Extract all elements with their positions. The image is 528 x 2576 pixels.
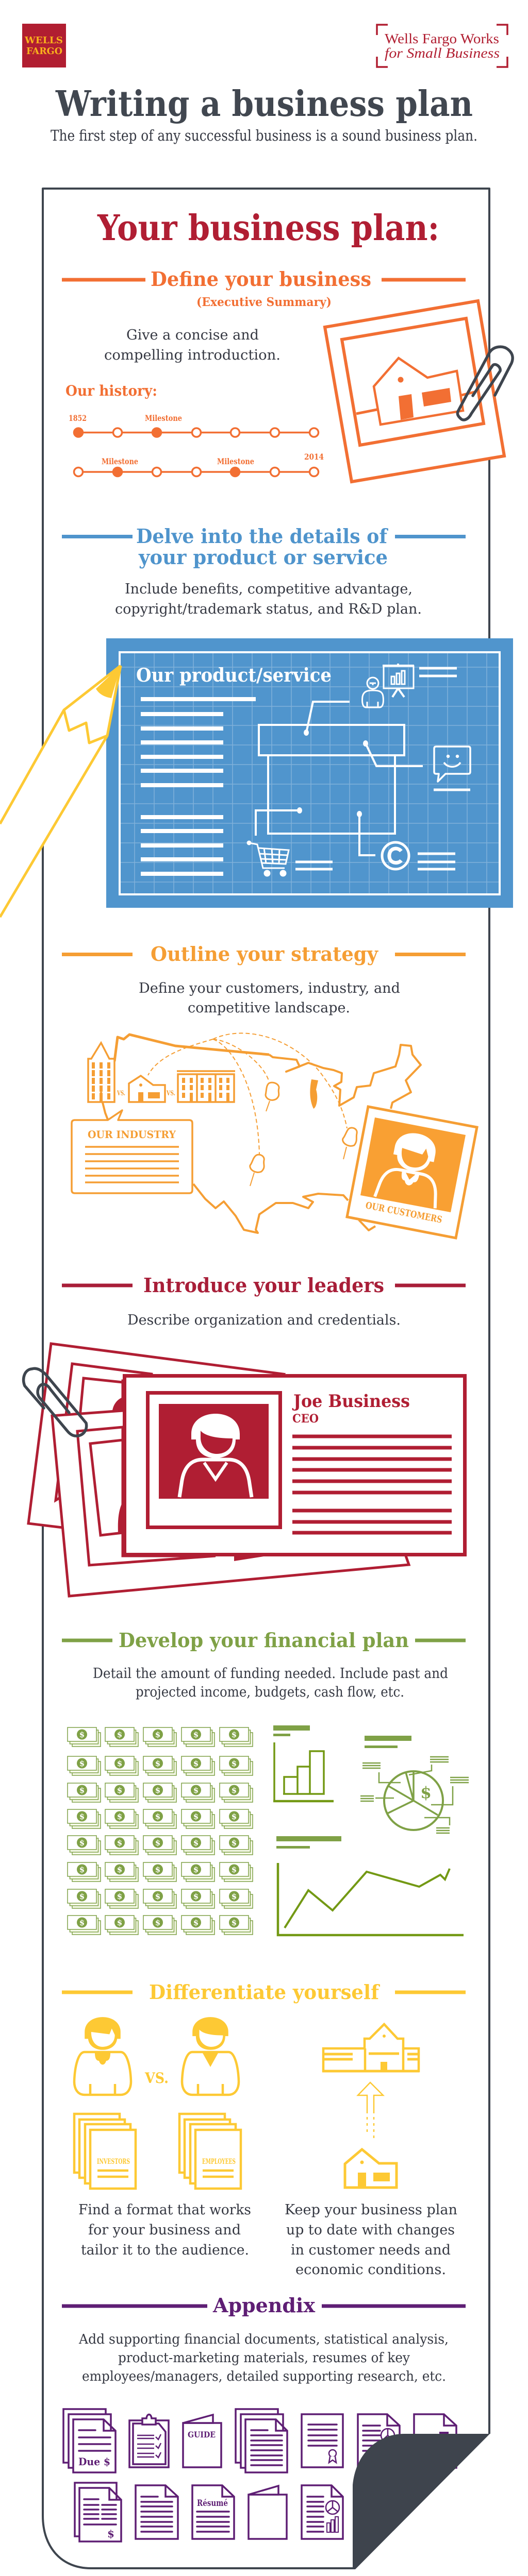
heading: Introduce your leaders: [62, 1274, 466, 1297]
text: appendix description: Add supporting financial documents, statistical analysis,: [78, 2332, 449, 2347]
icon: yellow pencil: [0, 666, 121, 917]
blueprint title: Our product/service: [136, 665, 332, 686]
icons: appendix documents: [63, 2409, 456, 2541]
section: product or service: [0, 524, 513, 917]
text: financial description: Detail the amount of funding needed. Include past and: [93, 1666, 448, 1682]
doc: charts page: [302, 2485, 343, 2539]
chart: pie chart: $: [420, 1784, 432, 1802]
text: keep up to date: in customer needs and: [291, 2242, 451, 2258]
icon: grid of money stacks: $$$$$: [79, 1865, 237, 1874]
icon: speech bubble with smile: [434, 747, 470, 782]
doc: report stack: [236, 2409, 287, 2472]
doc: chart report: [358, 2414, 400, 2468]
text: strategy description: Define your customers, industry, and: [139, 980, 400, 996]
heading: Our history: Our history:: [65, 382, 157, 399]
doc: partially covered page: [414, 2414, 456, 2468]
text: introduction: compelling introduction.: [104, 347, 280, 363]
icon: grid of money stacks: $$$$$: [79, 1838, 237, 1848]
heading: Your business plan: Your business plan:: [97, 208, 439, 249]
section: financial plan: [62, 1629, 469, 1935]
icon: woman vs man: VS.: [144, 2070, 169, 2087]
panel: blueprint: [106, 638, 513, 908]
doc: text page: [136, 2485, 178, 2539]
icon: competitor buildings: VS.: [166, 1090, 175, 1097]
heading: Develop your financial plan: Develop your financial plan: [119, 1629, 409, 1652]
text: format: for your business and: [88, 2222, 241, 2238]
icon: small house: [345, 2149, 397, 2188]
heading: Differentiate yourself: [62, 1980, 466, 2004]
doc: invoice stack: [75, 2483, 121, 2541]
timeline: row 1: [69, 413, 319, 437]
text: introduction: Give a concise and: [126, 327, 259, 343]
text: strategy description: competitive landscape.: [188, 1000, 350, 1016]
text: appendix description: product-marketing materials, resumes of key: [118, 2350, 410, 2366]
back papers: [28, 1344, 412, 1596]
heading: Differentiate yourself: Differentiate yourself: [149, 1980, 381, 2004]
icon: grid of money stacks: $$$$$: [79, 1892, 237, 1901]
blueprint text lines: [141, 699, 256, 874]
icon: competitor buildings: VS.: [117, 1090, 125, 1097]
heading: Define your business: [62, 267, 466, 309]
doc: invoice stack: $: [107, 2528, 114, 2540]
text: strategy description: [139, 980, 400, 1016]
text: format: tailor it to the audience.: [81, 2242, 249, 2258]
heading: Delve into the details: your product or service: [138, 546, 388, 569]
card: Joe Business: [125, 1376, 465, 1555]
blueprint side lines: [295, 668, 470, 869]
callout: our industry: OUR INDUSTRY: [88, 1128, 176, 1141]
icon: document stack employees: EMPLOYEES: [202, 2158, 236, 2166]
arrow: growth upward: [358, 2082, 383, 2140]
text: financial description: projected income, budgets, cash flow, etc.: [136, 1684, 404, 1700]
pins: [250, 1082, 357, 1172]
heading: Outline your strategy: [62, 942, 466, 965]
icon: grid of money stacks: $$$$$: [79, 1786, 237, 1795]
icon: customer polaroid: OUR CUSTOMERS: [365, 1200, 443, 1226]
panel: business plan page outline: [43, 189, 489, 2568]
chart: line chart: [276, 1836, 464, 1935]
heading: Introduce your leaders: Introduce your leaders: [143, 1274, 384, 1297]
timeline: row 2: Milestone: [217, 456, 254, 466]
icon: document stack investors: INVESTORS: [97, 2158, 130, 2166]
icon: document stack employees: [179, 2114, 241, 2189]
icon: grid of money stacks: $$$$$: [79, 1759, 237, 1768]
icon: shopping cart: [248, 841, 289, 876]
doc: guide booklet: [183, 2415, 221, 2467]
icon: grid of money stacks: $$$$$: [79, 1812, 237, 1821]
text: product description: copyright/trademark status, and R&D plan.: [115, 601, 422, 617]
icon: competitor buildings: [88, 1043, 235, 1102]
doc: clipboard: [129, 2414, 169, 2467]
heading: Appendix: [62, 2294, 466, 2317]
icon: grid of money stacks: $$$$$: [79, 1918, 237, 1927]
icon: polaroid with house: [325, 301, 504, 482]
icon: customer polaroid: [347, 1107, 477, 1238]
portrait: man: [179, 1414, 252, 1497]
doc: resume: Résumé: [197, 2498, 228, 2509]
doc: blank booklet: [249, 2486, 287, 2539]
text: format: [78, 2202, 251, 2258]
icon: grid of money stacks: $$$$$: [79, 1730, 237, 1739]
heading: Define your business: (Executive Summary): [196, 295, 332, 309]
doc: resume: [192, 2485, 234, 2539]
logo: Wells Fargo: WELLS: [24, 35, 63, 46]
text: leaders description: Describe organization and credentials.: [127, 1312, 401, 1328]
icon: woman vs man: [74, 2017, 239, 2095]
doc: due stack: [63, 2409, 116, 2472]
icon: grid of money stacks: [68, 1727, 253, 1935]
section: strategy: [62, 942, 477, 1238]
chart: US map with pins: [103, 1033, 421, 1233]
text: keep up to date: Keep your business plan: [285, 2202, 457, 2218]
section: define your business: [62, 267, 513, 482]
page curl: [353, 2434, 490, 2569]
heading: Appendix: Appendix: [212, 2294, 315, 2317]
text: format: Find a format that works: [78, 2202, 251, 2218]
chart: bar chart: [273, 1725, 334, 1801]
heading: Outline your strategy: Outline your strategy: [151, 942, 378, 965]
timeline: row 2: [74, 452, 324, 476]
text: product description: [115, 581, 422, 617]
doc: due stack: Due $: [78, 2455, 110, 2468]
icon: document stack investors: [74, 2114, 136, 2189]
logo: Wells Fargo Works for Small Business: [377, 25, 507, 67]
doc: guide booklet: GUIDE: [188, 2430, 216, 2439]
timeline: row 1: Milestone: [145, 413, 182, 423]
logo: Wells Fargo: FARGO: [26, 46, 62, 57]
heading: Define your business: Define your business: [151, 267, 371, 291]
icon: paperclip on papers: [24, 1368, 87, 1436]
callout: our industry: [72, 1110, 192, 1193]
heading: Delve into the details: Delve into the details of: [136, 524, 389, 548]
text: appendix description: [78, 2332, 449, 2384]
icon: larger building: [322, 2024, 419, 2071]
doc: certificate: [302, 2414, 343, 2467]
icon: presenter with chart: [362, 664, 414, 707]
section: differentiate: [62, 1980, 466, 2278]
timeline: row 2: Milestone: [102, 456, 138, 466]
title: Writing a business plan: [55, 83, 473, 125]
section: leaders: [24, 1274, 466, 1596]
text: keep up to date: economic conditions.: [295, 2262, 446, 2278]
chart: pie chart: [360, 1736, 469, 1833]
text: appendix description: employees/managers, detailed supporting research, etc.: [82, 2369, 446, 2384]
text: product description: Include benefits, competitive advantage,: [125, 581, 412, 597]
text: keep up to date: up to date with changes: [286, 2222, 455, 2238]
section: appendix: [62, 2294, 490, 2569]
card: Joe Business: Joe Business: [292, 1391, 410, 1412]
icon: copyright: [382, 842, 409, 869]
logo: Wells Fargo: [22, 24, 66, 67]
text: introduction: [104, 327, 280, 363]
card: Joe Business: CEO: [292, 1412, 319, 1426]
text: financial description: [93, 1666, 448, 1700]
icon: paperclip: [457, 347, 513, 420]
blueprint product diagram: [256, 702, 423, 855]
timeline: row 1: 1852: [69, 413, 87, 423]
timeline: row 2: 2014: [304, 452, 324, 462]
logo: Wells Fargo Works for Small Business: for Small Business: [385, 45, 500, 61]
text: keep up to date: [285, 2202, 457, 2278]
logo: Wells Fargo Works for Small Business: Wells Fargo Works: [385, 31, 499, 46]
heading: Delve into the details: [62, 524, 466, 569]
